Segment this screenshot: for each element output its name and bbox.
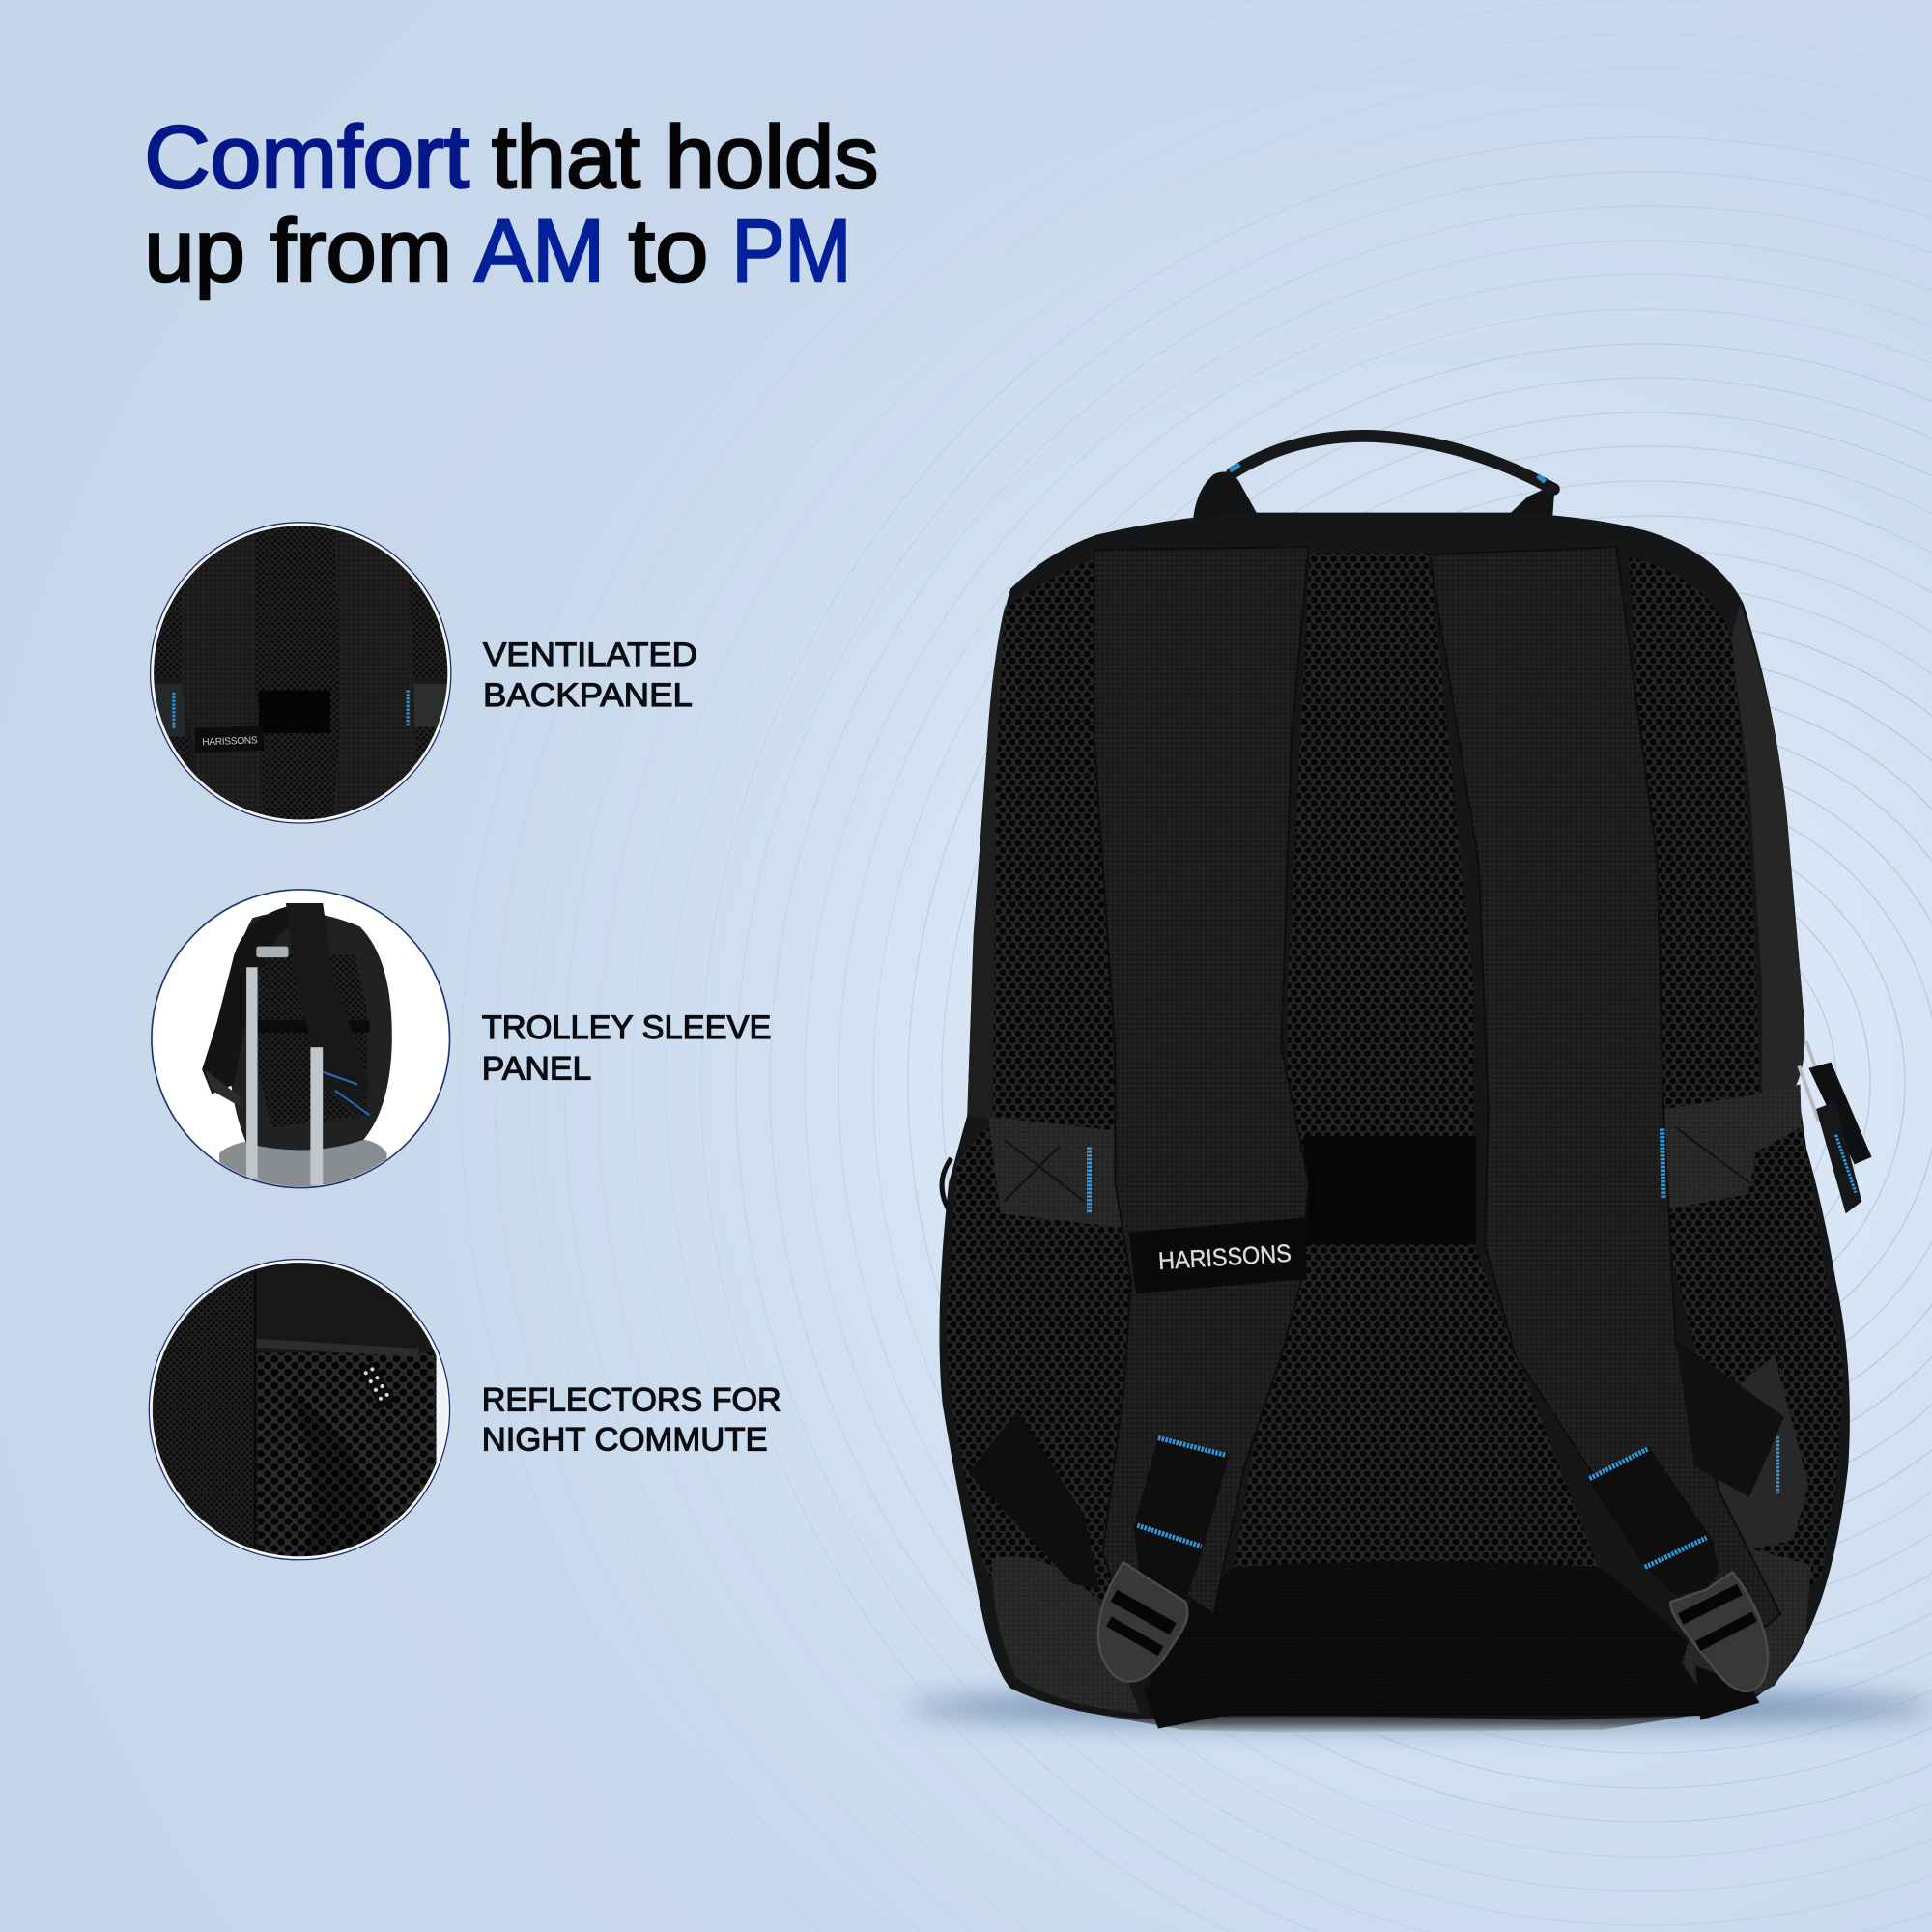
label: ventilated backpanel: BACKPANEL [483,677,693,714]
inset photo: trolley sleeve [148,887,456,1195]
left lower padded panel [992,1556,1140,1713]
label: trolley sleeve panel: TROLLEY SLEEVE [482,1009,771,1046]
title [144,108,878,300]
center ventilated mesh [1233,554,1602,1577]
left shell edge [967,604,1006,1119]
label: ventilated backpanel: VENTILATED [483,637,697,673]
center black band [1303,1136,1476,1244]
right side band [1663,1084,1802,1210]
right strap tail [1695,1665,1759,1720]
left lower mesh pocket [947,1127,1133,1627]
right lower panel [1700,1355,1808,1552]
left side wing strap [969,1410,1099,1589]
title: Comfort [144,108,469,207]
left webbing [1133,1436,1230,1602]
right shoulder strap [1430,547,1780,1661]
top handle [1193,436,1555,524]
left buckle [1098,1562,1187,1682]
right shell edge [1731,604,1804,1094]
right buckle [1670,1573,1768,1691]
title: up from [144,202,452,300]
right upper side mesh [1629,557,1759,1115]
title: that holds [492,108,878,207]
title: to [629,202,708,300]
inset photo: ventilated backpanel [148,520,456,828]
left upper side mesh [993,557,1115,1140]
title: PM [732,202,851,300]
feature: ventilated backpanel [148,520,707,828]
feature: trolley sleeve panel [148,887,781,1195]
left strap tail [1144,1678,1227,1729]
zipper pulls [1799,1041,1872,1213]
bottom light strip [1074,1710,1694,1732]
brand label [1128,1217,1306,1293]
right lower pad [1682,1540,1811,1716]
label: reflectors for night commute: NIGHT COMMUTE [482,1421,768,1458]
right webbing [1587,1446,1719,1596]
left shoulder strap [1094,547,1309,1614]
inset photo: reflectors [148,1257,456,1565]
feature: reflectors for night commute [148,1257,790,1565]
right lower mesh pocket [1658,1096,1843,1614]
left side band [988,1117,1131,1229]
bottom pad [1146,1561,1707,1716]
label: trolley sleeve panel: PANEL [482,1050,591,1087]
inset photo: ventilated backpanel: HARISSONS [202,735,258,748]
right side wing strap [1676,1339,1784,1497]
backpack [939,436,1872,1732]
label: reflectors for night commute: REFLECTORS FOR [482,1381,781,1418]
backpack ground shadow [906,1690,1932,1726]
side loop [942,1158,952,1210]
main body shell [939,513,1850,1720]
blue stitching [1090,1128,1778,1567]
brand label: HARISSONS [1157,1240,1293,1275]
title: AM [474,202,605,300]
